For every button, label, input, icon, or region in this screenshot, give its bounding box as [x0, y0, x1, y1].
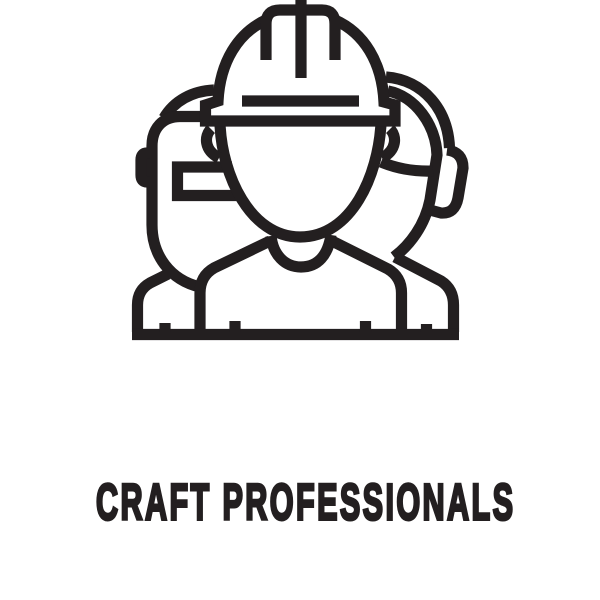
icon: craft professionals group [132, 0, 463, 334]
front worker: shoulders and collar [200, 235, 402, 332]
rear worker right: head and ear muff [381, 77, 463, 257]
base line and ticks [132, 321, 459, 334]
front worker: face and ears [206, 124, 395, 237]
front worker: hard hat [206, 0, 395, 121]
rear worker shoulders [138, 257, 454, 332]
title: CRAFT PROFESSIONALS [96, 473, 513, 530]
rear worker left: head [141, 90, 243, 287]
